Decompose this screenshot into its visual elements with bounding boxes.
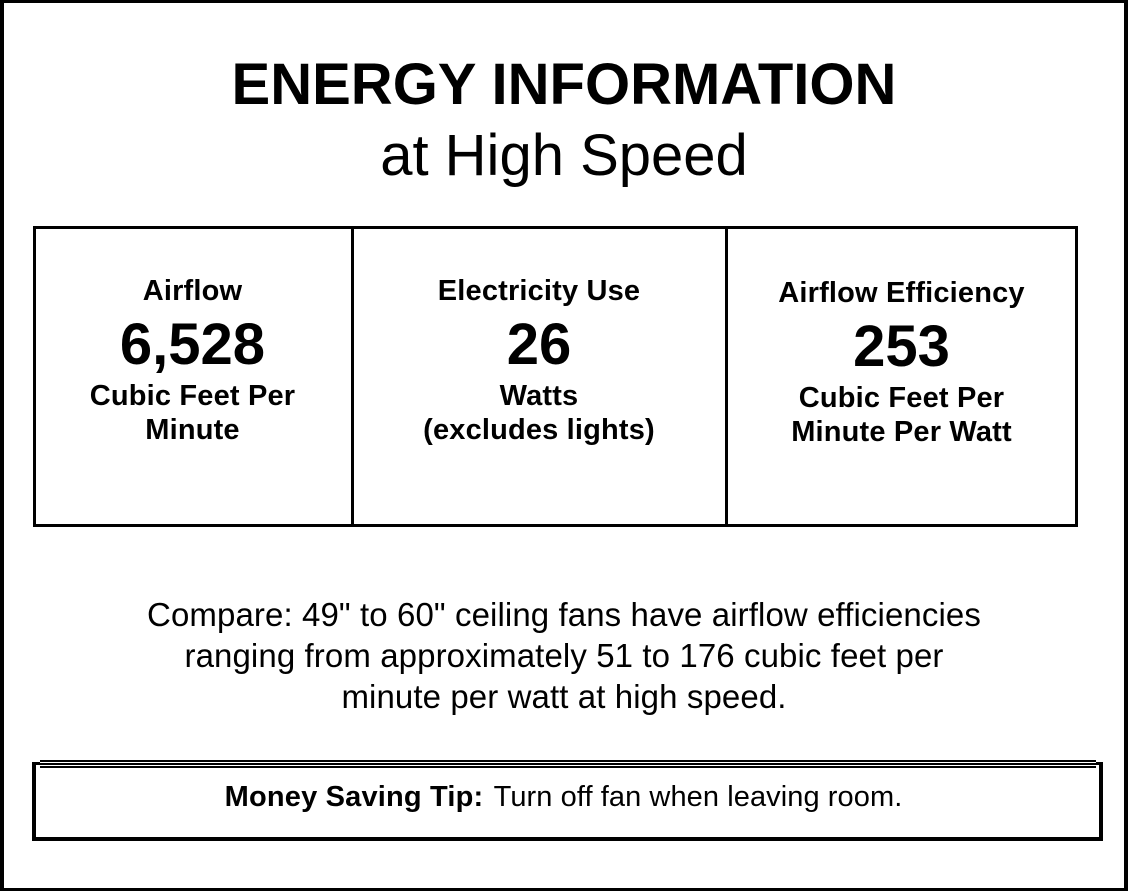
electricity unit: Watts [500, 380, 578, 412]
comparison text: minute per watt at high speed. [341, 678, 787, 715]
metrics table [33, 226, 1078, 527]
panel: airflow [36, 229, 354, 524]
airflow unit [90, 380, 295, 446]
electricity label: Electricity Use [438, 275, 640, 307]
electricity unit: (excludes lights) [423, 414, 655, 446]
airflow unit: Minute [145, 414, 240, 446]
money saving tip box [32, 760, 1103, 841]
electricity unit [423, 380, 655, 446]
airflow value: 6,528 [120, 312, 265, 376]
efficiency unit: Cubic Feet Per [799, 382, 1004, 414]
title line: energy information: ENERGY INFORMATION [232, 52, 896, 117]
title [232, 52, 896, 188]
comparison text: Compare: 49" to 60" ceiling fans have airflow efficiencies [147, 596, 981, 633]
panel: electricity use [354, 229, 728, 524]
airflow label: Airflow [143, 275, 242, 307]
electricity value: 26 [507, 312, 571, 376]
efficiency unit [791, 382, 1012, 448]
efficiency value: 253 [853, 314, 950, 378]
efficiency unit: Minute Per Watt [791, 416, 1012, 448]
subtitle: at high speed: at High Speed [380, 123, 748, 188]
comparison text: ranging from approximately 51 to 176 cubic feet per [184, 637, 944, 674]
comparison text [147, 596, 981, 715]
tip text: Money Saving Tip: Turn off fan when leaving room. [225, 781, 902, 813]
efficiency label: Airflow Efficiency [778, 277, 1025, 309]
panel: airflow efficiency [778, 277, 1025, 448]
airflow unit: Cubic Feet Per [90, 380, 295, 412]
